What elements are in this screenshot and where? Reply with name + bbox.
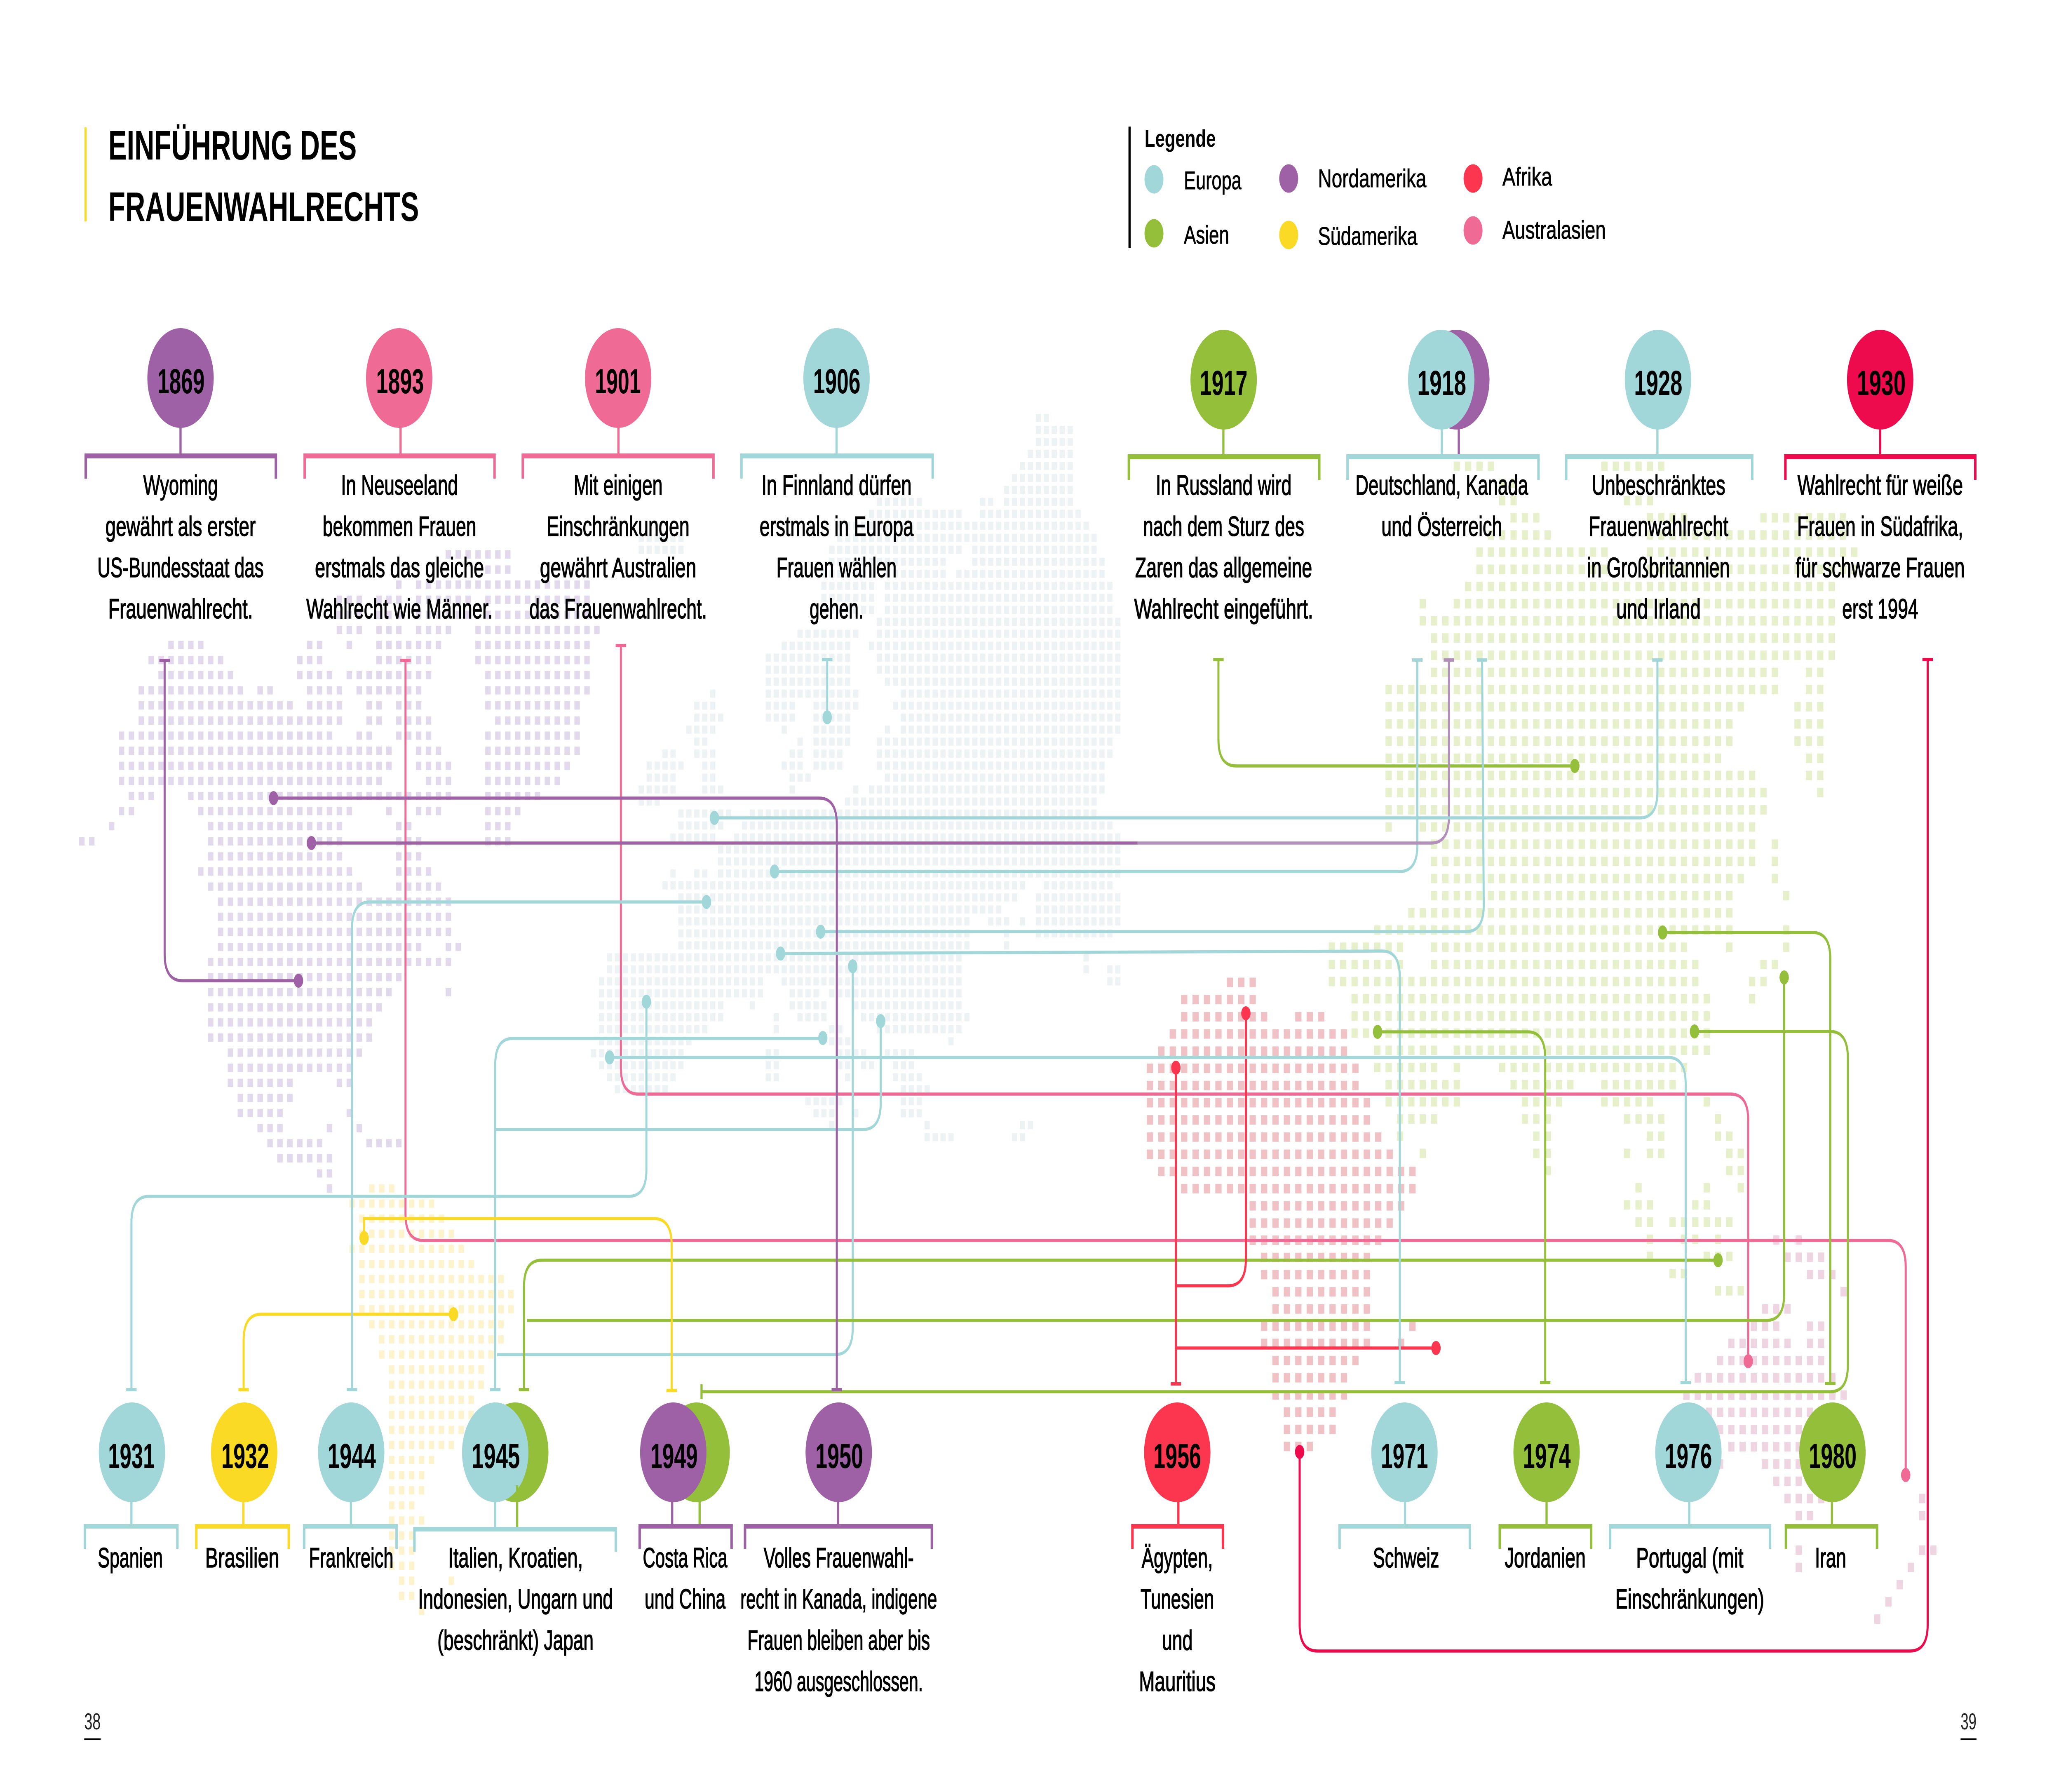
event 1956: Tunesien bbox=[1141, 1584, 1214, 1615]
line: 1945 Indonesien und Japan bbox=[519, 970, 1789, 1391]
line: 1918 Kanada bbox=[307, 658, 1454, 850]
event 1869: Frauenwahlrecht. bbox=[108, 594, 253, 625]
legend: Afrika bbox=[1502, 163, 1552, 191]
legend: Australasien bbox=[1502, 216, 1606, 244]
event 1928: 1928 bbox=[1634, 364, 1682, 403]
line: 1944 Frankreich bbox=[347, 895, 711, 1391]
event 1950 bbox=[740, 1402, 937, 1697]
event 1971: Schweiz bbox=[1373, 1543, 1439, 1574]
line: 1869 Wyoming bbox=[160, 659, 303, 988]
event 1980 bbox=[1785, 1402, 1878, 1574]
event 1980: 1980 bbox=[1809, 1437, 1857, 1476]
event 1945: (beschränkt) Japan bbox=[437, 1625, 594, 1656]
event 1945: Italien, Kroatien, bbox=[448, 1543, 583, 1574]
event 1901: Einschränkungen bbox=[547, 511, 690, 542]
line: 1949 China bbox=[700, 1024, 1848, 1399]
event 1949: Costa Rica bbox=[643, 1543, 728, 1574]
event 1906: Frauen wählen bbox=[777, 552, 897, 583]
event 1928: Unbeschränktes bbox=[1592, 470, 1725, 501]
event 1893: bekommen Frauen bbox=[323, 511, 476, 542]
event 1950: 1950 bbox=[815, 1437, 863, 1476]
event 1931: 1931 bbox=[108, 1437, 155, 1476]
event 1971 bbox=[1338, 1402, 1471, 1574]
event 1917: Wahlrecht eingeführt. bbox=[1134, 594, 1313, 625]
event 1950: Volles Frauenwahl- bbox=[764, 1543, 914, 1574]
event 1893: In Neuseeland bbox=[341, 470, 458, 501]
event 1932: Brasilien bbox=[205, 1543, 279, 1574]
event 1930: erst 1994 bbox=[1842, 594, 1918, 625]
event 1893: Wahlrecht wie Männer. bbox=[306, 594, 493, 625]
event 1976: Einschränkungen) bbox=[1615, 1584, 1764, 1615]
event 1901: gewährt Australien bbox=[540, 552, 696, 583]
event 1949 bbox=[638, 1402, 733, 1615]
line: 1950 Kanada bbox=[269, 791, 842, 1391]
line: 1930 Südafrika bbox=[1295, 658, 1933, 1651]
event 1928: und Irland bbox=[1616, 594, 1701, 625]
event 1869: US-Bundesstaat das bbox=[97, 552, 264, 583]
event 1930: Frauen in Südafrika, bbox=[1797, 511, 1963, 542]
event 1974: Jordanien bbox=[1505, 1543, 1586, 1574]
legend: Südamerika bbox=[1318, 222, 1418, 251]
event 1930: Wahlrecht für weiße bbox=[1798, 470, 1963, 501]
event 1901: das Frauenwahlrecht. bbox=[529, 594, 707, 625]
legend: Asien bbox=[1184, 221, 1229, 249]
connector lines bbox=[126, 644, 1933, 1651]
event 1974 bbox=[1499, 1402, 1592, 1574]
line: 1931 Spanien bbox=[126, 995, 651, 1391]
event 1869: 1869 bbox=[157, 362, 205, 401]
map: Asia bbox=[1329, 466, 1863, 1291]
line: 1971 Schweiz bbox=[776, 946, 1405, 1384]
event 1906: 1906 bbox=[813, 362, 860, 401]
legend bbox=[1129, 125, 1606, 251]
line: 1945 Italien, Kroatien, Ungarn bbox=[490, 959, 885, 1391]
event 1906: gehen. bbox=[810, 594, 864, 625]
event 1906: In Finnland dürfen bbox=[761, 470, 911, 501]
event 1901: Mit einigen bbox=[574, 470, 662, 501]
event 1956: Ägypten, bbox=[1142, 1543, 1213, 1574]
event 1918: Deutschland, Kanada bbox=[1355, 470, 1528, 501]
line: 1974 Jordanien bbox=[1373, 1025, 1550, 1384]
line: 1980 Iran bbox=[1658, 925, 1836, 1385]
legend: Legende bbox=[1145, 125, 1216, 152]
line: 1949 Costa Rica bbox=[359, 1219, 677, 1392]
event 1976: 1976 bbox=[1665, 1437, 1712, 1476]
event 1932: 1932 bbox=[221, 1437, 269, 1476]
event 1950: 1960 ausgeschlossen. bbox=[754, 1666, 923, 1697]
legend: Nordamerika bbox=[1318, 164, 1427, 193]
page number left: 38 bbox=[84, 1709, 101, 1735]
event 1945 bbox=[413, 1402, 617, 1656]
event 1869: gewährt als erster bbox=[106, 511, 256, 542]
event 1971: 1971 bbox=[1381, 1437, 1428, 1476]
event 1918: und Österreich bbox=[1381, 511, 1502, 542]
event 1901: 1901 bbox=[595, 362, 641, 401]
line: 1917 Russland bbox=[1213, 658, 1580, 773]
event 1917: Zaren das allgemeine bbox=[1135, 552, 1312, 583]
event 1956: Mauritius bbox=[1139, 1666, 1216, 1697]
event 1917 bbox=[1128, 330, 1321, 625]
event 1956: 1956 bbox=[1153, 1437, 1201, 1476]
map: Australasia bbox=[1683, 1240, 1941, 1619]
event 1918: 1918 bbox=[1417, 364, 1466, 403]
event 1949: 1949 bbox=[650, 1437, 698, 1476]
line: 1901 Australien bbox=[616, 644, 1753, 1368]
event 1917: nach dem Sturz des bbox=[1143, 511, 1304, 542]
event 1980: Iran bbox=[1815, 1543, 1846, 1574]
event 1976 bbox=[1609, 1402, 1771, 1615]
event 1944: Frankreich bbox=[309, 1543, 393, 1574]
line: 1918 Österreich bbox=[816, 658, 1487, 939]
event 1944 bbox=[303, 1402, 398, 1574]
line: 1906 Finnland bbox=[822, 658, 832, 724]
event 1956 bbox=[1131, 1402, 1224, 1697]
event 1930 bbox=[1784, 330, 1976, 625]
map: Europe and Russia bbox=[591, 418, 1123, 1137]
event 1869: Wyoming bbox=[143, 470, 218, 501]
line: 1932 Brasilien bbox=[238, 1307, 458, 1391]
event 1917: In Russland wird bbox=[1156, 470, 1291, 501]
event 1893 bbox=[303, 328, 496, 625]
event 1950: recht in Kanada, indigene bbox=[740, 1584, 937, 1615]
map: South America bbox=[349, 1188, 518, 1611]
title bbox=[85, 122, 419, 230]
event 1893: 1893 bbox=[376, 362, 424, 401]
event 1976: Portugal (mit bbox=[1636, 1543, 1744, 1574]
line: 1956 Ägypten, Tunesien, Mauritius bbox=[1171, 1006, 1441, 1386]
event 1906: erstmals in Europa bbox=[760, 511, 914, 542]
event 1918 bbox=[1346, 330, 1540, 542]
event 1950: Frauen bleiben aber bis bbox=[747, 1625, 930, 1656]
title: FRAUENWAHLRECHTS bbox=[108, 183, 419, 230]
line: 1918 Deutschland bbox=[770, 658, 1423, 878]
event 1949: und China bbox=[645, 1584, 726, 1615]
event 1930: 1930 bbox=[1857, 364, 1906, 403]
event 1901 bbox=[521, 328, 715, 625]
event 1928: in Großbritannien bbox=[1587, 552, 1730, 583]
map: Africa bbox=[1147, 982, 1421, 1447]
event 1930: für schwarze Frauen bbox=[1796, 552, 1965, 583]
event 1956: und bbox=[1162, 1625, 1192, 1656]
legend: Europa bbox=[1184, 167, 1242, 195]
event 1906 bbox=[740, 328, 934, 625]
line: 1976 Portugal bbox=[605, 1050, 1691, 1384]
event 1917: 1917 bbox=[1200, 364, 1247, 403]
map: North America bbox=[79, 554, 604, 1188]
event 1928 bbox=[1565, 330, 1753, 625]
line: 1893 Neuseeland bbox=[400, 659, 1911, 1482]
event 1945: 1945 bbox=[472, 1437, 520, 1476]
event 1869 bbox=[85, 328, 277, 625]
event 1928: Frauenwahlrecht bbox=[1589, 511, 1728, 542]
page number right: 39 bbox=[1960, 1709, 1976, 1735]
title: EINFÜHRUNG DES bbox=[108, 122, 357, 168]
event 1974: 1974 bbox=[1523, 1437, 1571, 1476]
event 1944: 1944 bbox=[328, 1437, 376, 1476]
event 1932 bbox=[195, 1402, 290, 1574]
dotted world map bbox=[79, 418, 1941, 1619]
line: 1928 Großbritannien bbox=[710, 658, 1663, 825]
event 1931 bbox=[84, 1402, 178, 1574]
event 1931: Spanien bbox=[98, 1543, 163, 1574]
event 1945: Indonesien, Ungarn und bbox=[418, 1584, 613, 1615]
event 1893: erstmals das gleiche bbox=[315, 552, 484, 583]
